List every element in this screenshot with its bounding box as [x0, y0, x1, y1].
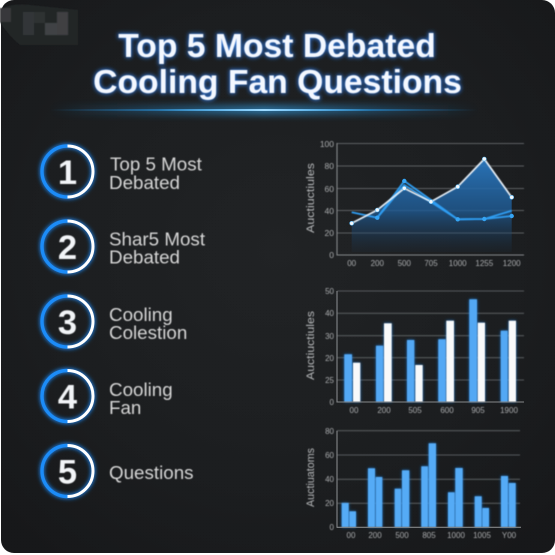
- x axis labels: 600: [440, 406, 454, 415]
- item 4: Cooling: [109, 379, 173, 400]
- item 4: 4: [58, 378, 77, 416]
- y axis labels: 40: [325, 206, 334, 216]
- y axis labels: [320, 139, 334, 260]
- x axis labels: 1000: [449, 259, 467, 268]
- item 4: [42, 370, 173, 422]
- y axis labels: 0: [329, 250, 334, 260]
- item 2: Debated: [109, 246, 180, 268]
- x axis labels: 1005: [473, 531, 491, 540]
- y axis title: Auctiuctiules: [305, 162, 317, 233]
- gridlines and axes: [337, 143, 524, 256]
- gridlines and axes: [337, 291, 524, 380]
- gridlines and axes: [337, 431, 520, 503]
- item 3: [42, 296, 187, 347]
- y axis labels: 0: [330, 398, 335, 407]
- y axis labels: [325, 287, 335, 407]
- item 1: 1: [58, 154, 77, 192]
- y axis title: Auctiuatoms: [305, 448, 317, 507]
- white series: [352, 159, 512, 223]
- grouped bar chart: blue and white: [305, 287, 524, 415]
- item 2: [42, 221, 206, 272]
- white bars: [353, 321, 516, 402]
- x axis labels: 500: [398, 259, 412, 268]
- bar glow: [342, 443, 516, 527]
- x axis labels: 200: [377, 406, 391, 415]
- bar glow: [344, 299, 516, 402]
- y axis labels: 80: [325, 427, 335, 436]
- x axis labels: 505: [408, 406, 422, 415]
- y axis labels: 25: [325, 376, 335, 385]
- baseline axes: [337, 431, 521, 528]
- title: Top 5 Most Debated: [118, 27, 436, 65]
- glowing divider: [50, 105, 478, 115]
- title: Cooling Fan Questions: [93, 63, 462, 101]
- blue bars: [344, 299, 508, 402]
- title: Top 5 Most Debated: [118, 27, 436, 65]
- x axis labels: 1200: [503, 259, 521, 268]
- x axis labels: 500: [395, 531, 409, 540]
- x axis labels: 00: [347, 531, 356, 540]
- x axis labels: 200: [371, 259, 385, 268]
- x axis labels: 805: [422, 531, 436, 540]
- x axis labels: 00: [350, 406, 359, 415]
- item 3: 3: [58, 304, 77, 342]
- y axis labels: 40: [325, 309, 335, 318]
- x axis labels: 905: [471, 406, 485, 415]
- x axis labels: [347, 531, 517, 540]
- y axis labels: 0: [330, 523, 335, 532]
- x axis labels: [347, 259, 521, 268]
- y axis labels: 20: [325, 354, 335, 363]
- y axis labels: 60: [325, 184, 334, 194]
- x axis labels: 1900: [500, 406, 518, 415]
- y axis labels: 50: [325, 287, 335, 296]
- item 4: Fan: [109, 397, 141, 418]
- mosaic watermark patch: [0, 5, 78, 45]
- x axis labels: [350, 406, 518, 415]
- x axis labels: 200: [368, 531, 382, 540]
- item 2: Shar5 Most: [109, 228, 206, 250]
- title: [93, 27, 462, 101]
- item 5: [42, 446, 194, 496]
- bars: [342, 443, 516, 527]
- x axis labels: 1255: [475, 259, 494, 268]
- y axis labels: 40: [325, 475, 335, 484]
- y axis labels: 30: [325, 332, 335, 341]
- y axis labels: [325, 427, 335, 532]
- y axis labels: 60: [325, 451, 335, 460]
- x axis labels: Y00: [502, 531, 517, 540]
- item 5: Questions: [109, 462, 194, 483]
- baseline axes: [337, 291, 524, 402]
- item 1: [42, 146, 203, 197]
- x axis labels: 1000: [447, 531, 465, 540]
- item 1: Debated: [109, 172, 180, 193]
- x axis labels: 00: [347, 259, 357, 268]
- y axis labels: 80: [325, 161, 334, 171]
- item 3: Cooling: [109, 304, 173, 325]
- area fill: [352, 159, 512, 252]
- blue series: [352, 181, 512, 219]
- item 5: 5: [58, 454, 77, 492]
- list: numbered questions: [42, 146, 206, 496]
- line chart: [305, 139, 524, 268]
- y axis title: Auctiuctiules: [305, 310, 317, 380]
- item 2: 2: [58, 229, 77, 267]
- y axis labels: 20: [325, 499, 335, 508]
- y axis labels: 20: [325, 228, 334, 238]
- x axis labels: 705: [424, 259, 438, 268]
- title: Cooling Fan Questions: [93, 63, 462, 101]
- y axis labels: 100: [320, 139, 334, 149]
- blue bar chart: [305, 427, 521, 540]
- item 3: Colestion: [109, 322, 187, 343]
- item 1: Top 5 Most: [110, 154, 203, 174]
